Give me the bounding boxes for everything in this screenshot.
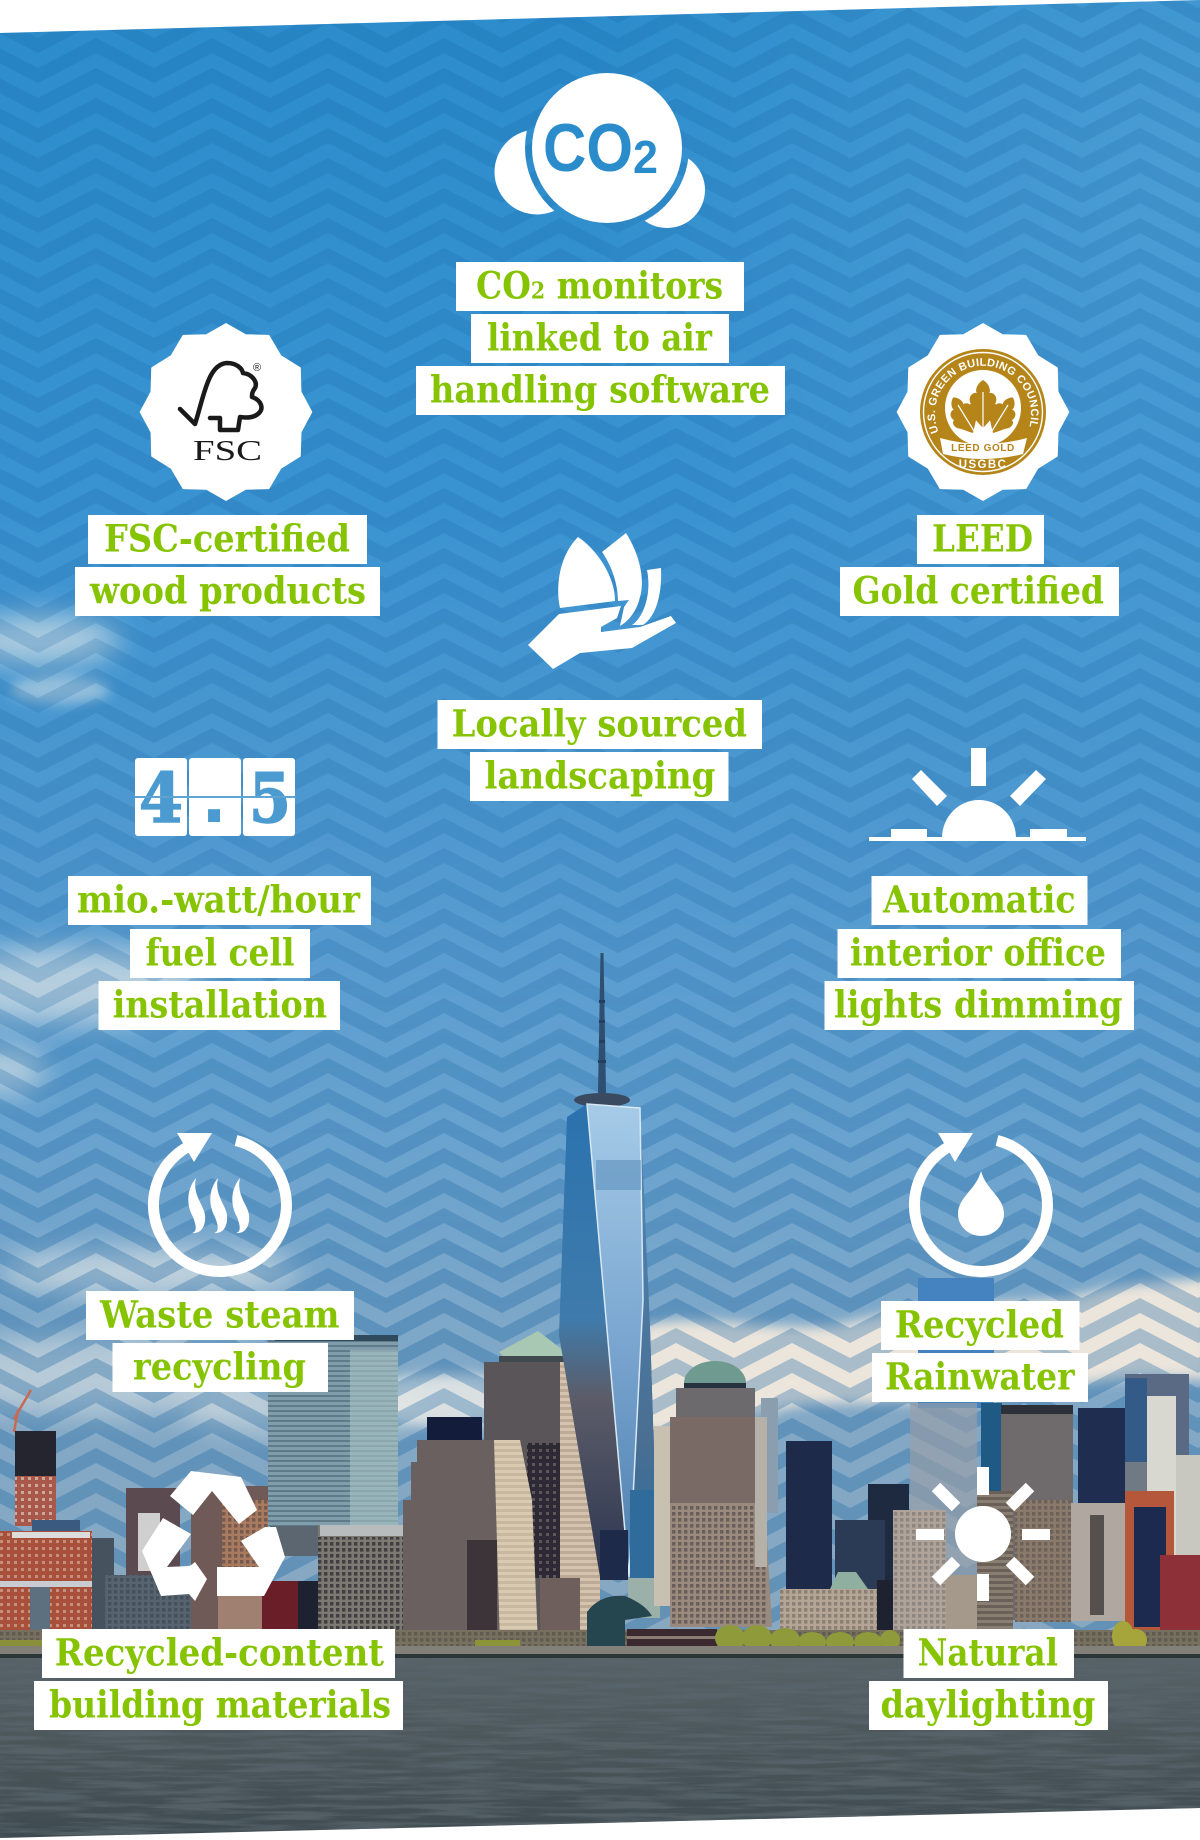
icon: LEED Gold seal: U.S. GREEN BUILDING COUNCIL [927,358,1039,434]
icon: FSC seal: ® [253,362,261,374]
caption: Recycled Rainwater: Recycled [895,1302,1064,1346]
left: red apartment block [0,1520,114,1630]
caption: Locally sourced landscaping: landscaping [484,754,716,798]
left: crane tower [14,1390,56,1526]
icon: 4.5 flip counter: 5 [249,759,291,839]
right ghost tower [910,1278,1002,1603]
stepped tower with dark cap [403,1417,538,1645]
caption: FSC-certified wood products: wood products [89,568,366,612]
caption: Recycled-content building materials: Recycled-content [55,1630,384,1674]
icon: hand holding leaves [528,533,676,669]
caption: Automatic interior office lights dimming: Automatic [882,878,1076,922]
One World Trade Center [559,953,660,1618]
caption: Waste steam recycling: recycling [133,1344,306,1388]
caption: Waste steam recycling: Waste steam [99,1292,340,1336]
caption: CO2 monitors [416,262,785,415]
shoreline and trees [0,1621,1200,1659]
caption: Waste steam recycling [86,1291,354,1392]
caption: FSC-certified wood products [75,515,380,616]
caption: CO2 monitors: linked to air [487,316,712,360]
caption: LEED Gold certified: Gold certified [852,568,1104,612]
caption: Recycled Rainwater [872,1301,1088,1402]
icon: CO2 cloud: CO [543,110,633,186]
skyline [0,953,1200,1659]
caption: Automatic interior office lights dimming: interior office [850,930,1106,974]
water [0,1658,1200,1840]
icon: LEED Gold seal: USGBC [959,459,1007,471]
icon: recycling arrows [142,1471,285,1601]
icon: CO2 cloud [494,73,705,228]
icon: CO2 cloud: 2 [633,131,658,183]
caption: CO2 monitors: CO2 monitors [476,264,723,308]
antenna [598,953,606,1093]
caption: Automatic interior office lights dimming: lights dimming [834,982,1123,1026]
dark mid towers and low blocks [780,1441,909,1630]
left: mid-rise cluster [105,1486,318,1633]
caption: LEED Gold certified: LEED [932,516,1033,560]
caption: Recycled-content building materials: building materials [49,1682,391,1726]
green-roof tower [484,1331,600,1640]
icon: sunset over horizon [869,748,1086,841]
caption: mio.-watt/hour fuel cell installation: installation [113,982,327,1026]
icon: LEED Gold seal: LEED GOLD [951,443,1015,454]
icon: steam recycling arrow [153,1133,286,1272]
caption: Natural daylighting: Natural [918,1630,1058,1674]
icon: LEED Gold seal [896,323,1070,501]
icon: 4.5 flip counter: . [201,760,227,839]
round glass tower [268,1335,398,1556]
caption: Natural daylighting [869,1629,1108,1730]
caption: mio.-watt/hour fuel cell installation [68,876,371,1030]
caption: Locally sourced landscaping: Locally sourced [452,702,747,746]
caption: Automatic interior office lights dimming [824,876,1134,1030]
icon: FSC seal: FSC [193,435,262,467]
caption: Recycled Rainwater: Rainwater [885,1354,1075,1398]
low office block [318,1525,403,1630]
caption: Natural daylighting: daylighting [880,1682,1096,1726]
dome tower [654,1361,778,1627]
icon: rainwater recycling arrow [914,1133,1047,1272]
right centre towers [893,1405,1073,1632]
icon: 4.5 flip counter [135,758,295,839]
caption: FSC-certified wood products: FSC-certified [104,516,350,560]
base of tower and atrium [0,1596,1200,1650]
caption: Recycled-content building materials [34,1629,403,1730]
icon: sun [916,1467,1050,1601]
caption: LEED Gold certified [840,515,1119,616]
caption: CO2 monitors: handling software [430,368,770,412]
caption: mio.-watt/hour fuel cell installation: fuel cell [146,930,294,974]
icon: 4.5 flip counter: 4 [139,759,183,839]
clouds [0,614,1200,1435]
caption: Locally sourced landscaping [438,700,762,801]
icon: FSC seal [141,324,311,500]
caption: mio.-watt/hour fuel cell installation: mio.-watt/hour [77,878,360,922]
right towers [1071,1374,1200,1647]
